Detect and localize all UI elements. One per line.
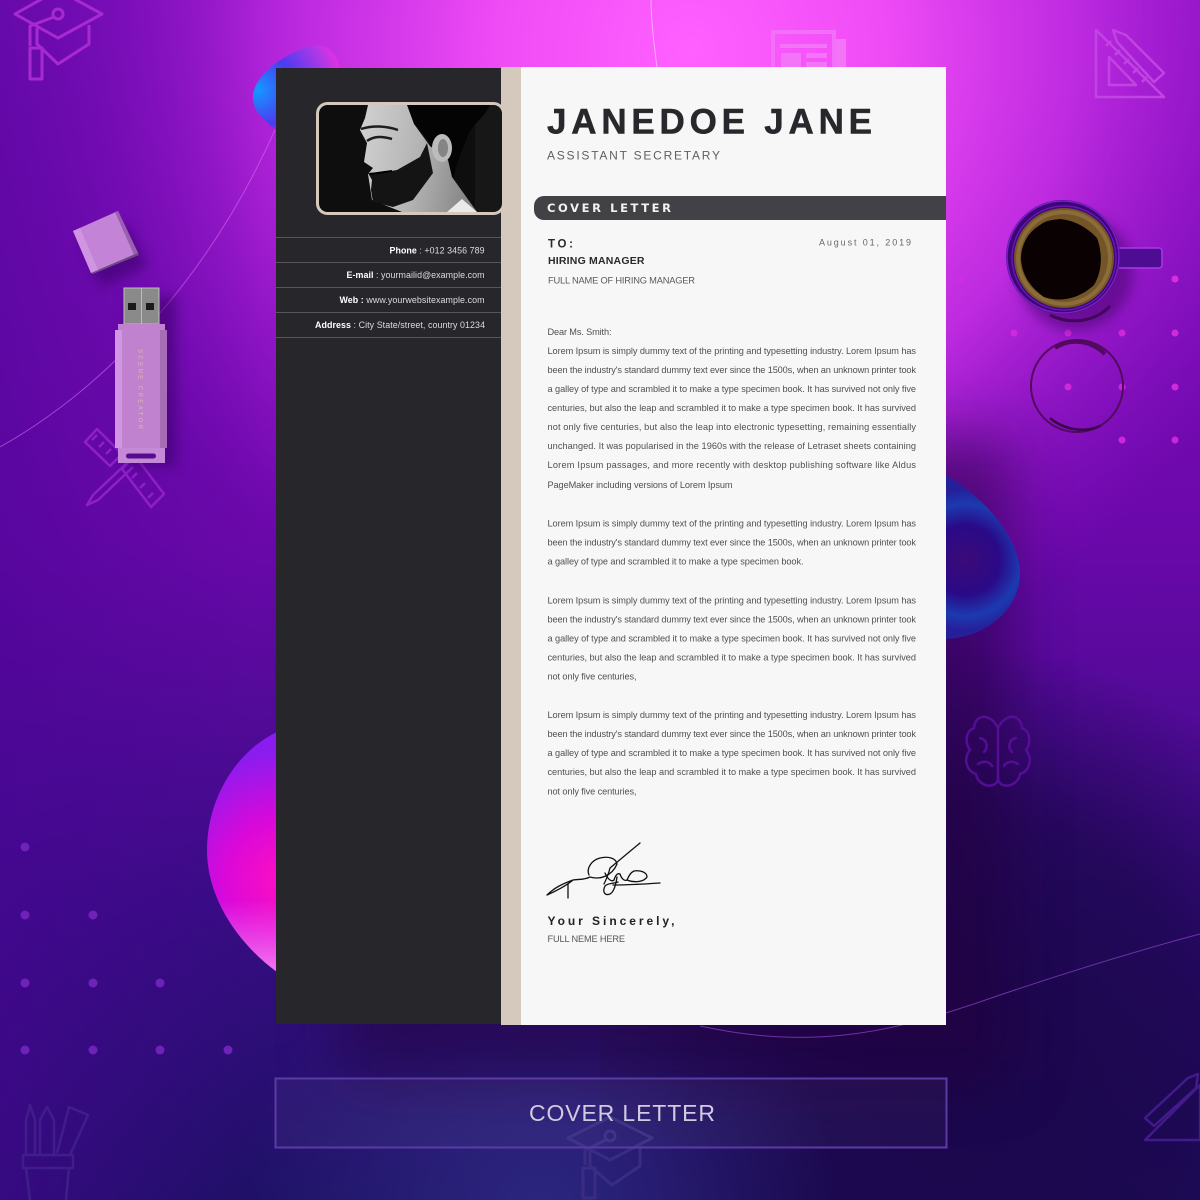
paragraph 2: been the industry's standard dummy text ever since the 1500s, when an unknown printer took — [548, 538, 916, 548]
paragraph 1 — [548, 346, 916, 490]
bottom title box — [276, 1078, 946, 1148]
icon: set square and pencil bottom right — [1145, 1074, 1200, 1140]
paragraph 1: Lorem Ipsum is simply dummy text of the printing and typesetting industry. Lorem Ipsum has — [548, 346, 916, 356]
web: Web : www.yourwebsitexample.com — [340, 295, 484, 305]
paragraph 2: a galley of type and scrambled it to make a type specimen book. — [548, 556, 804, 566]
blob: lower left behind document — [207, 732, 277, 972]
icon: document top centre — [773, 32, 846, 69]
icon: pencil cup bottom left — [23, 1105, 88, 1200]
sign-off: FULL NEME HERE — [548, 934, 625, 944]
paragraph 1: Lorem Ipsum passages, and more recently with desktop publishing software like Aldus — [548, 460, 916, 470]
icon: set square and pencil top right — [1096, 30, 1164, 97]
paragraph 1: not only five centuries, but also the leap into electronic typesetting, remaining essentially — [548, 422, 916, 432]
section bar: cover letter — [534, 196, 946, 220]
signature — [547, 843, 660, 898]
blob: top left behind document — [253, 45, 340, 140]
paragraph 4: a galley of type and scrambled it to make a type specimen book. It has survived not only five — [548, 748, 916, 758]
paragraph 3 — [548, 596, 916, 682]
panel: sidebar — [276, 68, 502, 1024]
paragraph 2: Lorem Ipsum is simply dummy text of the printing and typesetting industry. Lorem Ipsum has — [548, 518, 916, 528]
bottom title box: COVER LETTER — [529, 1100, 715, 1126]
recipient block: FULL NAME OF HIRING MANAGER — [548, 276, 695, 286]
paragraph 4: not only five centuries, — [548, 786, 636, 796]
sign-off — [548, 914, 674, 944]
paragraph 4: centuries, but also the leap and scrambled it to make a type specimen book. It has survived — [548, 767, 916, 777]
paragraph 3: not only five centuries, — [548, 672, 636, 682]
icon: ruler and pencil left — [85, 429, 164, 507]
paragraph 3: been the industry's standard dummy text ever since the 1500s, when an unknown printer took — [548, 614, 916, 624]
dot grid left — [20, 842, 232, 1054]
paragraph 1: been the industry's standard dummy text ever since the 1500s, when an unknown printer took — [548, 365, 916, 375]
dot grid right — [958, 276, 1178, 444]
email: E-mail : yourmailid@example.com — [346, 270, 484, 280]
phone: Phone : +012 3456 789 — [390, 246, 485, 256]
recipient block: HIRING MANAGER — [548, 255, 645, 267]
paragraph 1: centuries, but also the leap and scrambled it to make a type specimen book. It has survived — [548, 403, 916, 413]
recipient block: Dear Ms. Smith: — [548, 327, 612, 337]
paragraph 2 — [548, 518, 916, 566]
panel: paper — [521, 67, 946, 1025]
paragraph 3: Lorem Ipsum is simply dummy text of the printing and typesetting industry. Lorem Ipsum has — [548, 596, 916, 606]
paragraph 4: Lorem Ipsum is simply dummy text of the printing and typesetting industry. Lorem Ipsum has — [548, 710, 916, 720]
recipient block: TO: — [548, 238, 573, 250]
icon: graduation cap top left — [15, 0, 102, 79]
recipient block: August 01, 2019 — [819, 238, 911, 248]
paragraph 1: PageMaker including versions of Lorem Ipsum — [548, 480, 733, 490]
document — [276, 67, 946, 1025]
USB drive cap — [73, 211, 148, 287]
name heading: JANEDOE JANE — [547, 102, 872, 142]
paragraph 4: been the industry's standard dummy text ever since the 1500s, when an unknown printer took — [548, 729, 916, 739]
coffee ring stain — [1031, 306, 1123, 432]
paragraph 1: a galley of type and scrambled it to make a type specimen book. It has survived not only five — [548, 384, 916, 394]
contact list — [276, 238, 501, 338]
paragraph 3: a galley of type and scrambled it to make a type specimen book. It has survived not only five — [548, 634, 916, 644]
USB metal connector — [124, 288, 159, 324]
paragraph 3: centuries, but also the leap and scrambled it to make a type specimen book. It has survived — [548, 652, 916, 662]
coffee cup — [1006, 200, 1162, 330]
paragraph 4 — [548, 710, 916, 796]
address: Address : City State/street, country 01234 — [315, 320, 485, 330]
paragraph 1: unchanged. It was popularised in the 1960s with the release of Letraset sheets containing — [548, 441, 916, 451]
beige strip — [501, 67, 522, 1025]
icon: brain right — [966, 717, 1030, 786]
job title: ASSISTANT SECRETARY — [547, 148, 720, 162]
icon: graduation cap bottom centre — [568, 1117, 652, 1198]
portrait photo — [318, 104, 504, 214]
blob: right behind document — [930, 472, 1020, 639]
USB brand text: SCENE CREATOR — [136, 349, 142, 430]
section bar: cover letter: COVER LETTER — [547, 201, 671, 215]
sign-off: Your Sincerely, — [548, 914, 674, 928]
recipient block — [548, 238, 911, 337]
USB drive — [115, 288, 176, 466]
cup handle — [1112, 248, 1162, 268]
